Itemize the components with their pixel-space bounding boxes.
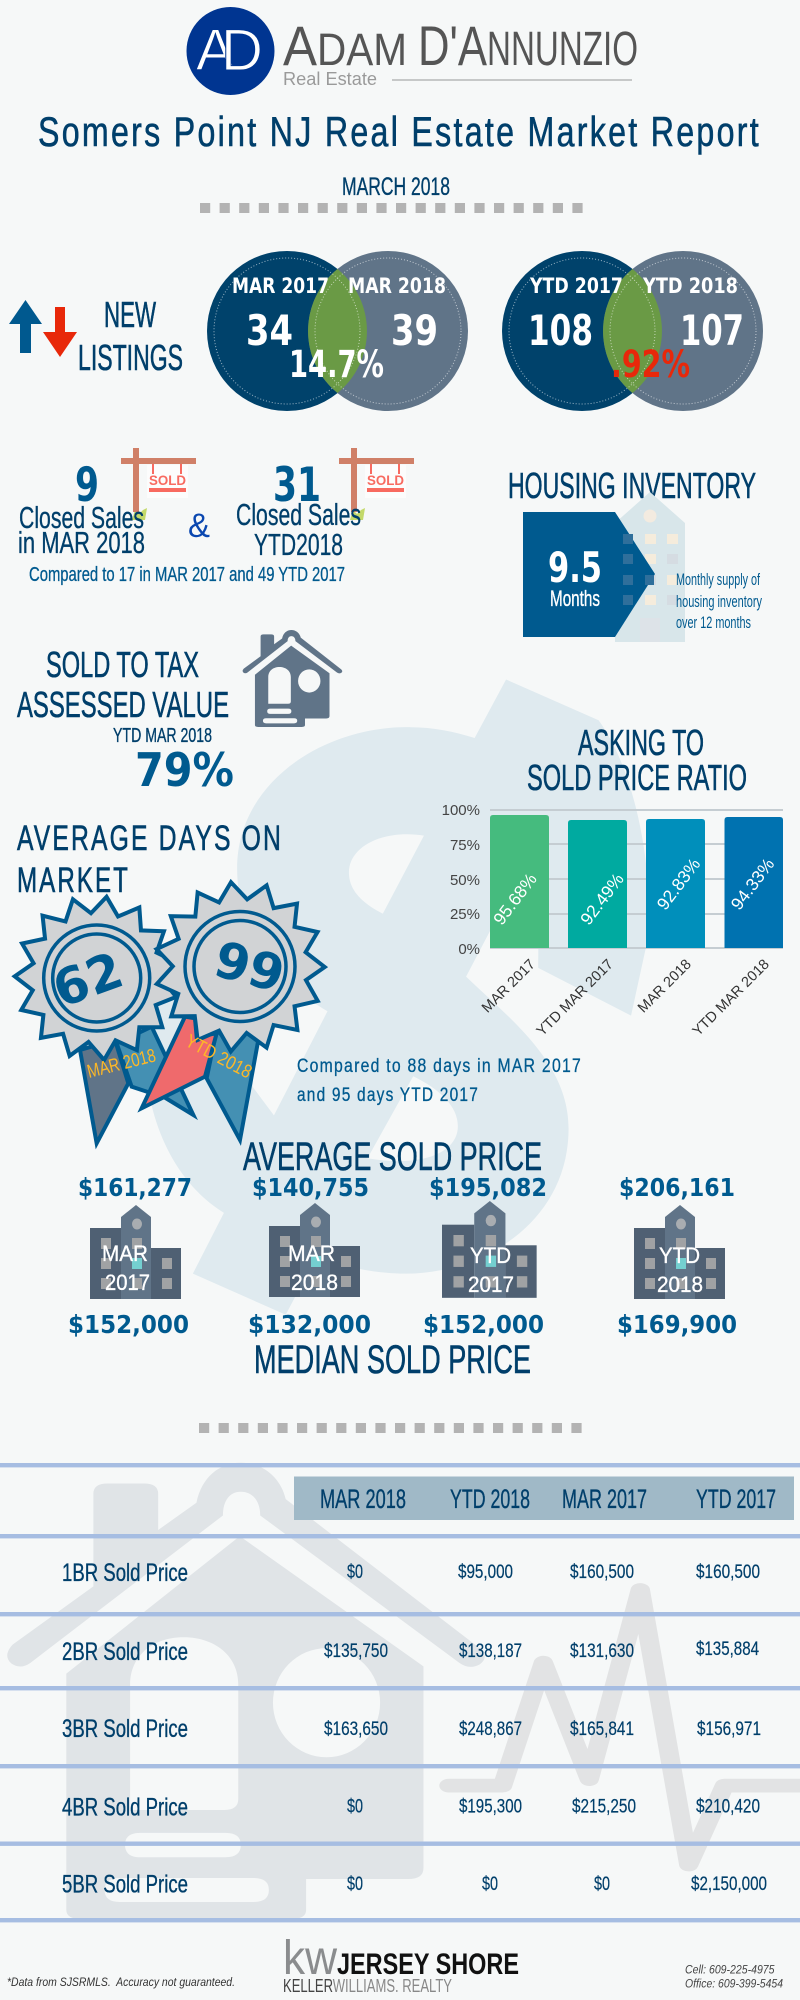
closed sales March 2018: Closed Sales	[19, 500, 144, 535]
average sold prices: $195,082	[429, 1173, 547, 1202]
days on market comparison note: Compared to 88 days in MAR 2017	[297, 1056, 582, 1077]
icon: house	[243, 630, 342, 727]
data source note: *Data from SJSRMLS. Accuracy not guaranteed.	[7, 1977, 235, 1989]
icon: up arrow	[9, 300, 42, 353]
housing inventory arrow panel: 9.5	[548, 543, 602, 592]
logo: Adam D'Annunzio Real Estate: A	[283, 14, 318, 77]
venn chart: YTD new listings: YTD 2017	[529, 274, 623, 298]
bar chart: asking to sold price ratio: 50%	[450, 872, 480, 889]
row labels: 2BR Sold Price	[62, 1638, 188, 1666]
bar chart: asking to sold price ratio: 92.49%	[576, 869, 628, 929]
table values: $195,300	[459, 1796, 522, 1818]
icon: building YTD 2017: YTD	[470, 1243, 511, 1268]
bar chart: asking to sold price ratio: 95.68%	[489, 869, 541, 929]
table header: MAR 2017	[562, 1484, 647, 1514]
icon: down arrow	[43, 307, 77, 357]
average sold prices: $206,161	[619, 1173, 735, 1202]
table values: $0	[347, 1796, 363, 1818]
background house watermark	[7, 1463, 485, 1919]
bar chart: asking to sold price ratio: YTD MAR 2018	[690, 957, 773, 1040]
average sold prices: $140,755	[252, 1173, 369, 1202]
row labels: 3BR Sold Price	[62, 1715, 188, 1743]
table values: $135,884	[696, 1639, 759, 1660]
bar chart: asking to sold price ratio: MAR 2017	[479, 957, 539, 1016]
ribbon label: YTD 2018: YTD 2018	[182, 1031, 255, 1083]
medal: 62 days	[15, 897, 177, 1060]
icon: sold sign 2	[339, 448, 414, 520]
venn chart: monthly new listings: 39	[391, 306, 438, 355]
bar chart: asking to sold price ratio: 0%	[458, 941, 480, 958]
bar chart: asking to sold price ratio	[442, 802, 783, 1040]
icon: building MAR 2017: MAR	[102, 1241, 148, 1266]
table values: $215,250	[572, 1796, 636, 1818]
subtitle: March 2018: MARCH 2018	[342, 173, 450, 201]
icon: sold sign 1	[121, 448, 196, 520]
table values	[324, 1562, 767, 1895]
bar chart: asking to sold price ratio: 25%	[450, 906, 480, 923]
closed sales YTD 2018: YTD2018	[254, 527, 343, 562]
table header	[294, 1476, 794, 1520]
medal: 99 days: 99	[208, 930, 291, 1004]
housing inventory arrow panel	[523, 512, 655, 637]
table values: $0	[594, 1874, 610, 1895]
row labels: 5BR Sold Price	[62, 1870, 188, 1898]
logo: Keller Williams Jersey Shore	[283, 1932, 519, 1996]
bar chart: asking to sold price ratio: 92.83%	[653, 854, 704, 914]
heading: new listings	[78, 294, 183, 378]
logo: Adam D'Annunzio Real Estate: A	[196, 18, 235, 83]
icon: building MAR 2018: MAR	[288, 1241, 335, 1266]
table values: $156,971	[697, 1719, 761, 1740]
table values: $138,187	[459, 1641, 522, 1662]
closed sales YTD 2018	[236, 458, 361, 562]
icon: building YTD 2017: 2017	[468, 1272, 514, 1297]
days on market comparison note: and 95 days YTD 2017	[297, 1085, 479, 1106]
background dollar sign	[144, 680, 649, 1315]
icon: sold sign 1: SOLD	[149, 472, 186, 488]
closed sales YTD 2018: Closed Sales	[236, 497, 361, 532]
ampersand: &	[188, 507, 210, 545]
table values: $163,650	[324, 1719, 388, 1740]
contact details: Office: 609-399-5454	[685, 1976, 783, 1990]
average sold prices: $161,277	[78, 1173, 192, 1202]
row labels: 1BR Sold Price	[62, 1559, 188, 1587]
median sold prices: $152,000	[68, 1310, 189, 1339]
icon: building MAR 2018: 2018	[291, 1270, 338, 1295]
heading: sold to tax assessed value	[17, 644, 229, 747]
heading: sold to tax assessed value: SOLD TO TAX	[46, 644, 199, 685]
row labels: 4BR Sold Price	[62, 1794, 188, 1822]
heading: asking to sold price ratio	[527, 722, 747, 798]
table header: YTD 2018	[450, 1484, 530, 1514]
closed sales YTD 2018: 31	[273, 458, 321, 513]
heading: average days on market: MARKET	[17, 861, 130, 900]
medal: 99 days	[138, 866, 340, 1068]
bar chart: asking to sold price ratio: 94.33%	[727, 854, 778, 914]
logo: Adam D'Annunzio Real Estate: Real Estate	[283, 69, 377, 89]
icon: building MAR 2018	[269, 1203, 360, 1297]
table: sold price by bedroom count	[62, 1476, 794, 1898]
logo: Adam D'Annunzio Real Estate: NNUNZIO	[487, 23, 638, 76]
heading: new listings: LISTINGS	[78, 337, 183, 378]
housing inventory arrow panel: Months	[550, 586, 600, 611]
icon: building YTD 2018	[634, 1205, 725, 1299]
closed sales comparison note: Compared to 17 in MAR 2017 and 49 YTD 2017	[29, 564, 345, 586]
medal: 62 days: 62	[45, 941, 131, 1019]
table values: $165,841	[570, 1719, 634, 1740]
bar chart: asking to sold price ratio: 100%	[442, 802, 480, 819]
venn chart: YTD new listings: YTD 2018	[642, 274, 738, 298]
row labels	[62, 1559, 188, 1898]
venn chart: YTD new listings	[502, 251, 763, 411]
logo: Adam D'Annunzio Real Estate: D	[221, 18, 263, 83]
icon: building YTD 2018: 2018	[657, 1272, 703, 1297]
table values: $0	[347, 1874, 363, 1895]
logo: Keller Williams Jersey Shore: KELLERWILLIAMS. REALTY	[283, 1976, 452, 1996]
venn chart: monthly new listings: MAR 2018	[348, 274, 446, 298]
bar chart: asking to sold price ratio: 75%	[450, 837, 480, 854]
housing inventory caption: over 12 months	[676, 613, 751, 632]
heading: average sold price: AVERAGE SOLD PRICE	[243, 1135, 542, 1179]
table values: $160,500	[696, 1562, 760, 1583]
table header: MAR 2018	[320, 1484, 406, 1514]
table values: $95,000	[458, 1562, 513, 1583]
heading: sold to tax assessed value: ASSESSED VALUE	[17, 684, 229, 725]
heading: new listings: NEW	[104, 294, 156, 335]
median sold prices	[68, 1310, 737, 1339]
venn chart: monthly new listings	[207, 251, 468, 411]
closed sales March 2018	[18, 458, 145, 560]
table values: $2,150,000	[691, 1874, 767, 1895]
heading: asking to sold price ratio: ASKING TO	[578, 722, 704, 763]
contact details: Cell: 609-225-4975	[685, 1962, 775, 1976]
logo: Keller Williams Jersey Shore: kw	[283, 1932, 337, 1985]
icon: building MAR 2017: 2017	[105, 1270, 150, 1295]
median sold prices: $152,000	[423, 1310, 544, 1339]
venn chart: YTD new listings: 107	[680, 306, 744, 355]
icon: building MAR 2017	[90, 1205, 181, 1299]
heading: median sold price: MEDIAN SOLD PRICE	[254, 1338, 531, 1382]
heading: average days on market: AVERAGE DAYS ON	[17, 819, 283, 858]
venn chart: YTD new listings: .92%	[611, 343, 690, 386]
venn chart: YTD new listings: 108	[528, 306, 593, 355]
table values: $135,750	[324, 1641, 388, 1662]
bar chart: asking to sold price ratio: MAR 2018	[635, 957, 695, 1016]
bar chart: asking to sold price ratio: YTD MAR 2017	[534, 957, 617, 1040]
heading: average days on market	[17, 819, 283, 900]
contact details	[685, 1962, 783, 1990]
housing inventory caption	[676, 570, 762, 632]
table values: $131,630	[570, 1641, 634, 1662]
venn chart: monthly new listings: MAR 2017	[232, 274, 329, 298]
icon: building YTD 2018: YTD	[659, 1243, 700, 1268]
background pulse line	[449, 1590, 800, 1865]
venn chart: monthly new listings: 14.7%	[289, 343, 384, 386]
days on market comparison note	[297, 1056, 582, 1106]
icon: pale building	[615, 492, 685, 642]
heading: sold to tax assessed value: YTD MAR 2018	[113, 725, 212, 747]
venn chart: monthly new listings: 34	[246, 306, 293, 355]
icon: sold sign 2: SOLD	[367, 472, 404, 488]
table values: $160,500	[570, 1562, 634, 1583]
table values: $210,420	[696, 1796, 760, 1818]
logo: Keller Williams Jersey Shore: JERSEY SHORE	[337, 1948, 519, 1981]
median sold prices: $169,900	[617, 1310, 737, 1339]
stat: 79 percent: 79%	[135, 743, 234, 797]
logo: Adam D'Annunzio Real Estate: D'A	[418, 14, 488, 77]
table values: $0	[347, 1562, 363, 1583]
closed sales March 2018: in MAR 2018	[18, 525, 145, 560]
logo: Adam D'Annunzio Real Estate	[186, 7, 638, 95]
table values: $0	[482, 1874, 498, 1895]
medals: days on market ribbons	[15, 866, 340, 1143]
average sold prices	[78, 1173, 735, 1202]
median sold prices: $132,000	[248, 1310, 371, 1339]
table values: $248,867	[459, 1719, 522, 1740]
ribbon label: MAR 2018: MAR 2018	[85, 1046, 158, 1083]
closed sales March 2018: 9	[75, 458, 99, 513]
logo: Adam D'Annunzio Real Estate: DAM	[317, 24, 407, 75]
icon: building YTD 2017	[442, 1201, 537, 1298]
